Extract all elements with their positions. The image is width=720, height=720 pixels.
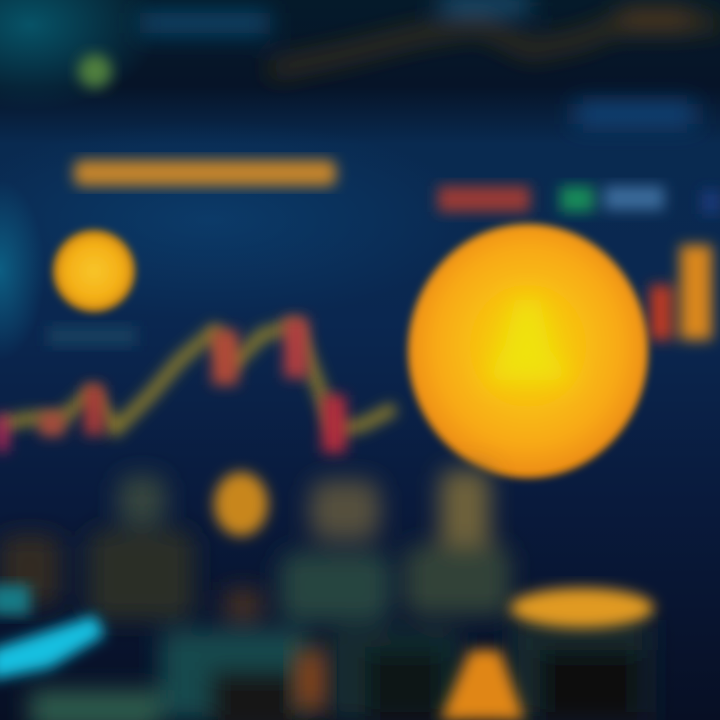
heading [74,160,336,186]
orange flame [440,650,525,720]
cyan streak [0,615,105,680]
orange cup top [510,588,654,628]
main coin [408,224,648,478]
small coin label [48,326,136,346]
coin symbol [485,300,575,380]
mid coin [214,472,268,536]
orange glow [295,650,325,710]
legend labels [438,186,720,214]
small green dot top left [78,54,112,88]
background glow [0,0,480,360]
coin stacks [0,470,650,720]
small coin [53,230,135,312]
top chart lines [140,0,720,125]
cyan left edge [0,585,30,615]
line chart [0,325,395,430]
red candles [0,245,712,453]
